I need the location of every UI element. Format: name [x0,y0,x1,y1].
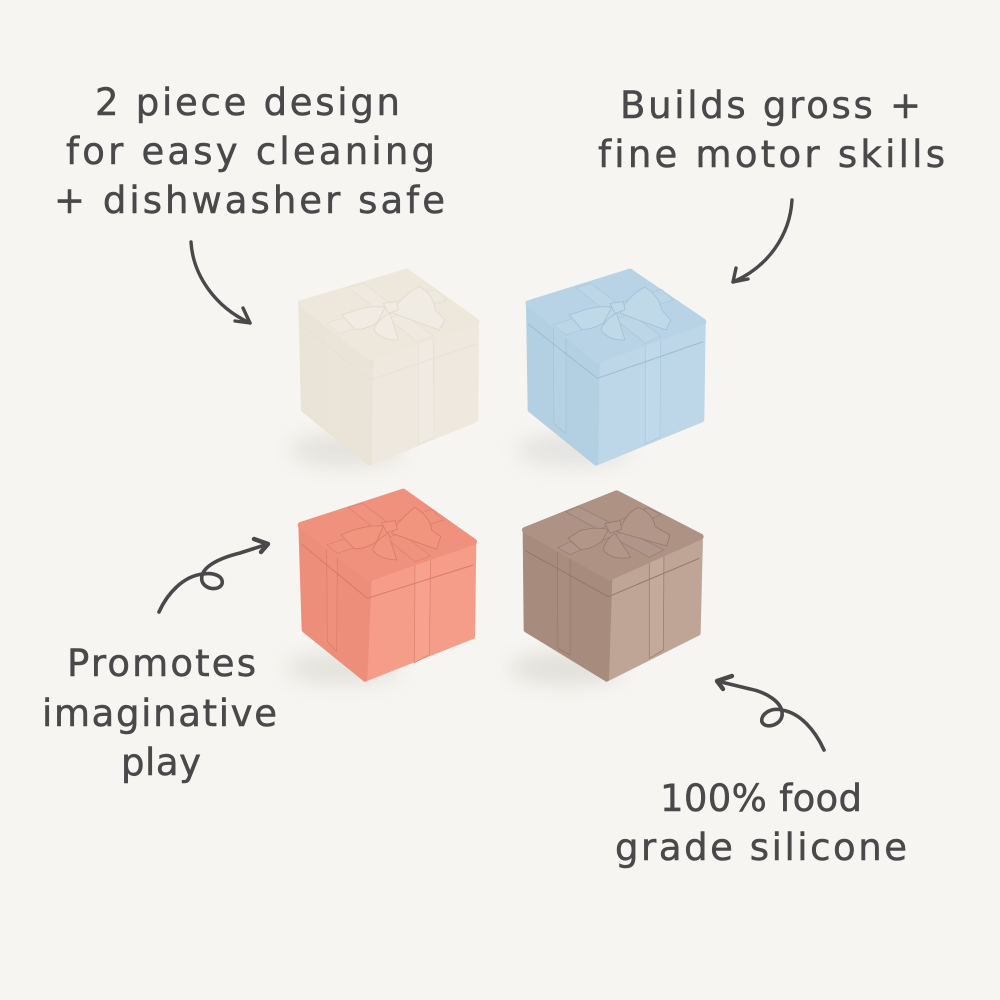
heading: promotes imaginative play: play [121,741,201,784]
heading: 100% food grade silicone: 100% food [660,777,862,820]
heading: builds gross and fine motor skills [598,84,945,176]
heading: 2 piece design: 2 piece design [95,81,400,124]
heading: 100% food grade silicone [615,777,907,869]
heading: 2 piece design: + dishwasher safe [54,179,445,222]
gift: coral [287,492,474,685]
arrow: to cream gift [191,242,250,323]
heading: 2 piece design: for easy cleaning [66,130,435,173]
heading: builds gross and fine motor skills: Builds gross + [620,84,921,127]
bow [569,287,671,340]
heading: 2 piece design [54,81,445,222]
ribbon bands [553,283,673,343]
bow [568,507,670,558]
ribbon bands [327,283,447,342]
heading: promotes imaginative play: Promotes [67,642,256,685]
heading: promotes imaginative play [42,642,277,784]
gift: taupe [510,493,701,685]
ribbon bands [557,507,664,557]
arrow: looped to coral gift [159,539,268,612]
bow [342,287,445,340]
arrow: to blue gift [733,200,792,282]
ribbon bands [327,503,443,562]
heading: 100% food grade silicone: grade silicone [615,826,907,869]
heading: promotes imaginative play: imaginative [42,692,277,735]
gift: cream [290,272,477,467]
heading: builds gross and fine motor skills: fine motor skills [598,133,945,176]
arrow: looped to taupe gift [717,676,824,750]
gift: blue [517,272,703,467]
bow [341,507,441,560]
